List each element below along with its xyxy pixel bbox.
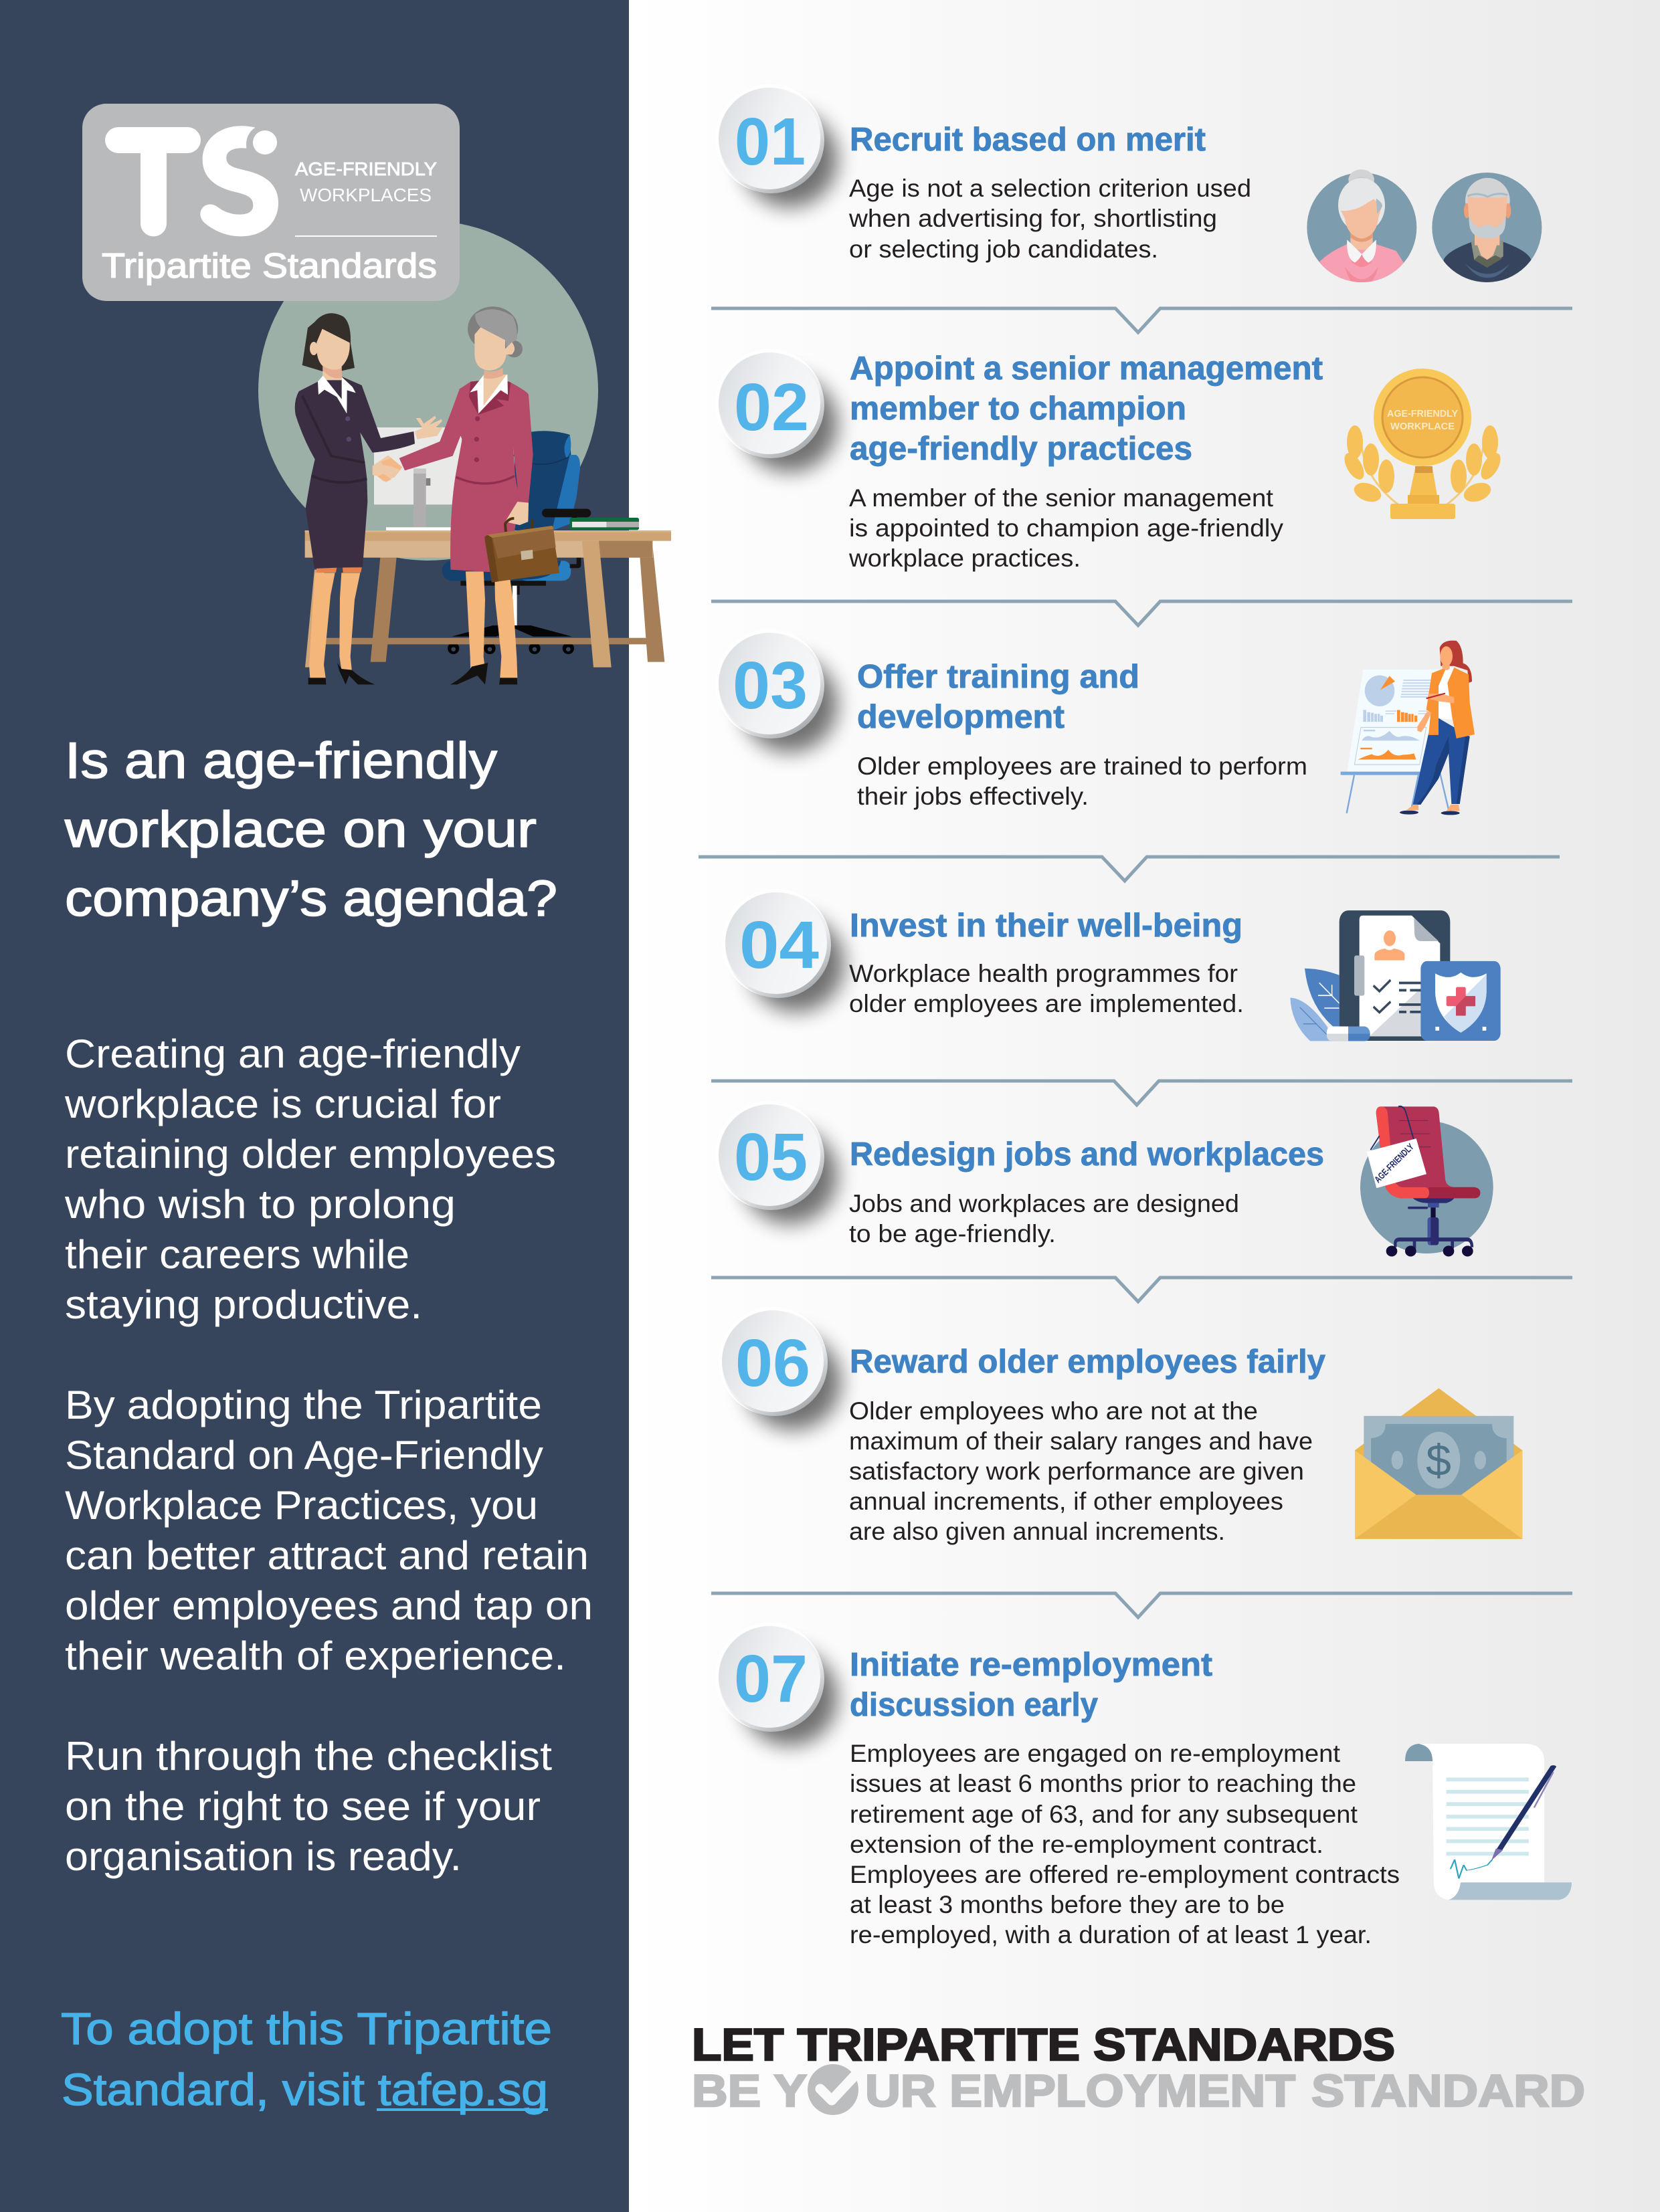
title <box>857 659 1139 735</box>
panel: left sidebar <box>0 0 629 2212</box>
text block: intro paragraph: retaining older employees <box>65 1132 556 1177</box>
description: extension of the re-employment contract. <box>850 1831 1323 1858</box>
divider arrow 4 <box>711 1081 1572 1105</box>
tagline line 2: STANDARD <box>1311 2066 1585 2116</box>
divider arrow 5 <box>711 1278 1572 1302</box>
woman with magenta suit <box>399 306 533 684</box>
icon: envelope with banknote <box>1355 1388 1522 1539</box>
text block: adoption paragraph: can better attract and retain <box>65 1533 589 1578</box>
step 04 <box>722 889 1501 1041</box>
description: to be age-friendly. <box>849 1220 1056 1247</box>
heading: agenda question: workplace on your <box>64 801 537 858</box>
title: Reward older employees fairly <box>850 1344 1325 1380</box>
icon: red office chair with age-friendly tag <box>1360 1106 1493 1256</box>
description: satisfactory work performance are given <box>849 1457 1304 1485</box>
text block: adoption paragraph <box>65 1383 593 1678</box>
icon: trophy: AGE-FRIENDLY <box>1387 408 1458 419</box>
number badge 04: 04 <box>739 908 819 983</box>
description <box>849 960 1244 1017</box>
icon: check mark letter O <box>808 2064 862 2115</box>
text block: intro paragraph <box>64 1031 556 1327</box>
right panel background <box>629 0 1660 2212</box>
title: member to champion <box>850 391 1186 427</box>
number badge 02: 02 <box>734 370 809 445</box>
divider arrow 1 <box>711 308 1572 332</box>
title: Initiate re-employment <box>850 1647 1212 1683</box>
description: Workplace health programmes for <box>849 960 1238 987</box>
description: Employees are offered re-employment contracts <box>850 1861 1400 1888</box>
number badge 06 <box>719 1307 841 1430</box>
divider arrow 6 <box>711 1593 1572 1617</box>
title <box>850 1647 1212 1723</box>
tagline line 2 <box>692 2064 1585 2116</box>
description: workplace practices. <box>848 544 1081 572</box>
heading: agenda question <box>64 732 557 927</box>
text block: checklist paragraph: organisation is ready. <box>65 1834 462 1879</box>
description: issues at least 6 months prior to reaching the <box>850 1770 1356 1797</box>
icon: trophy <box>1340 369 1505 519</box>
description: is appointed to champion age-friendly <box>849 514 1284 542</box>
description <box>848 484 1284 572</box>
tagline line 2: UR EMPLOYMENT <box>865 2066 1295 2116</box>
description: Age is not a selection criterion used <box>849 175 1251 202</box>
description: their jobs effectively. <box>857 783 1089 810</box>
text block: adoption paragraph: their wealth of experience. <box>65 1633 566 1678</box>
icon: contract scroll and pen <box>1405 1744 1572 1900</box>
title: Appoint a senior management <box>850 350 1323 387</box>
number badge 06: 06 <box>735 1326 810 1401</box>
number badge 07 <box>715 1623 838 1746</box>
description: are also given annual increments. <box>849 1518 1225 1545</box>
decorative circle behind illustration <box>258 221 598 561</box>
text block: checklist paragraph: on the right to see if your <box>65 1784 541 1829</box>
text block: intro paragraph: who wish to prolong <box>64 1182 456 1227</box>
logo label: tripartite standards: Tripartite Standards <box>102 247 437 286</box>
description: when advertising for, shortlisting <box>848 205 1217 232</box>
logo letter S <box>200 126 278 236</box>
logo: Tripartite Standards <box>82 104 460 301</box>
description: older employees are implemented. <box>849 990 1244 1017</box>
description <box>857 752 1307 810</box>
office chair <box>442 431 591 654</box>
description: Jobs and workplaces are designed <box>849 1190 1239 1217</box>
books on desk <box>570 518 639 530</box>
description: annual increments, if other employees <box>849 1488 1283 1515</box>
icon: red office chair with age-friendly tag: AGE-FRIENDLY <box>1372 1141 1416 1185</box>
logo label: age-friendly: AGE-FRIENDLY <box>295 159 437 179</box>
title: Offer training and <box>857 659 1139 695</box>
text block: checklist paragraph: Run through the checklist <box>65 1734 552 1779</box>
title: Recruit based on merit <box>850 122 1206 158</box>
description: Older employees who are not at the <box>849 1397 1258 1425</box>
text block: adoption paragraph: By adopting the Tripartite <box>65 1383 542 1427</box>
hands <box>373 416 529 525</box>
number badge 01: 01 <box>735 104 806 179</box>
icon: trophy: WORKPLACE <box>1390 421 1455 432</box>
monitor <box>374 427 462 530</box>
number badge 05 <box>715 1101 838 1224</box>
tagline line 2: BE Y <box>692 2066 807 2116</box>
divider arrow 2 <box>711 601 1572 625</box>
footer tagline <box>692 2019 1585 2116</box>
icon: older woman and older man <box>1307 169 1542 288</box>
text block: checklist paragraph <box>65 1734 552 1879</box>
title: Invest in their well-being <box>850 908 1242 944</box>
illustration: two women shaking hands at a desk <box>295 306 671 684</box>
call to action: To adopt this Tripartite <box>61 2004 552 2054</box>
text block: intro paragraph: staying productive. <box>65 1282 422 1327</box>
description: at least 3 months before they are to be <box>850 1891 1285 1918</box>
number badge 01 <box>715 84 838 207</box>
step 01 <box>715 84 1542 288</box>
icon: woman presenting chart <box>1341 641 1475 815</box>
logo letter T <box>105 127 201 237</box>
icon: health document and shield <box>1290 910 1501 1041</box>
desk <box>305 530 671 668</box>
logo label: workplaces: WORKPLACES <box>300 185 432 205</box>
icon: envelope with banknote: $ <box>1426 1435 1451 1485</box>
step 03 <box>715 629 1475 815</box>
description: Older employees are trained to perform <box>857 752 1307 780</box>
woman with dark suit <box>295 313 415 684</box>
description <box>848 175 1251 263</box>
title: Redesign jobs and workplaces <box>850 1136 1324 1173</box>
heading: agenda question: Is an age-friendly <box>65 732 497 789</box>
description: or selecting job candidates. <box>849 235 1158 263</box>
step 02 <box>715 349 1505 572</box>
text block: intro paragraph: their careers while <box>65 1232 409 1277</box>
description <box>849 1397 1313 1545</box>
number badge 03 <box>715 629 838 752</box>
description: maximum of their salary ranges and have <box>849 1427 1313 1455</box>
step 05 <box>715 1101 1493 1256</box>
call to action: Standard, visit tafep.sg <box>62 2065 548 2115</box>
description: re-employed, with a duration of at least 1 year. <box>850 1921 1372 1948</box>
title <box>850 350 1323 467</box>
logo dot <box>253 130 277 155</box>
step 07 <box>715 1623 1572 1948</box>
number badge 03: 03 <box>733 648 808 723</box>
number badge 05: 05 <box>734 1120 808 1195</box>
description <box>850 1740 1400 1948</box>
text block: intro paragraph: Creating an age-friendly <box>65 1031 521 1076</box>
description: retirement age of 63, and for any subsequent <box>850 1801 1358 1828</box>
heading: agenda question: company’s agenda? <box>65 870 557 927</box>
briefcase <box>484 518 559 583</box>
step 06 <box>719 1307 1522 1545</box>
number badge 07: 07 <box>734 1641 808 1716</box>
title: discussion early <box>850 1687 1098 1723</box>
description <box>849 1190 1239 1247</box>
call to action <box>61 2004 552 2115</box>
title: development <box>857 699 1065 735</box>
text block: adoption paragraph: older employees and tap on <box>65 1583 593 1628</box>
text block: intro paragraph: workplace is crucial for <box>64 1082 501 1126</box>
title: age-friendly practices <box>850 431 1192 467</box>
description: Employees are engaged on re-employment <box>850 1740 1341 1767</box>
text block: adoption paragraph: Standard on Age-Friendly <box>65 1433 543 1478</box>
tagline line 1: LET TRIPARTITE STANDARDS <box>692 2019 1395 2070</box>
number badge 02 <box>715 349 838 472</box>
divider arrow 3 <box>699 857 1560 881</box>
number badge 04 <box>722 889 844 1012</box>
text block: adoption paragraph: Workplace Practices, you <box>65 1483 538 1528</box>
description: A member of the senior management <box>849 484 1274 512</box>
